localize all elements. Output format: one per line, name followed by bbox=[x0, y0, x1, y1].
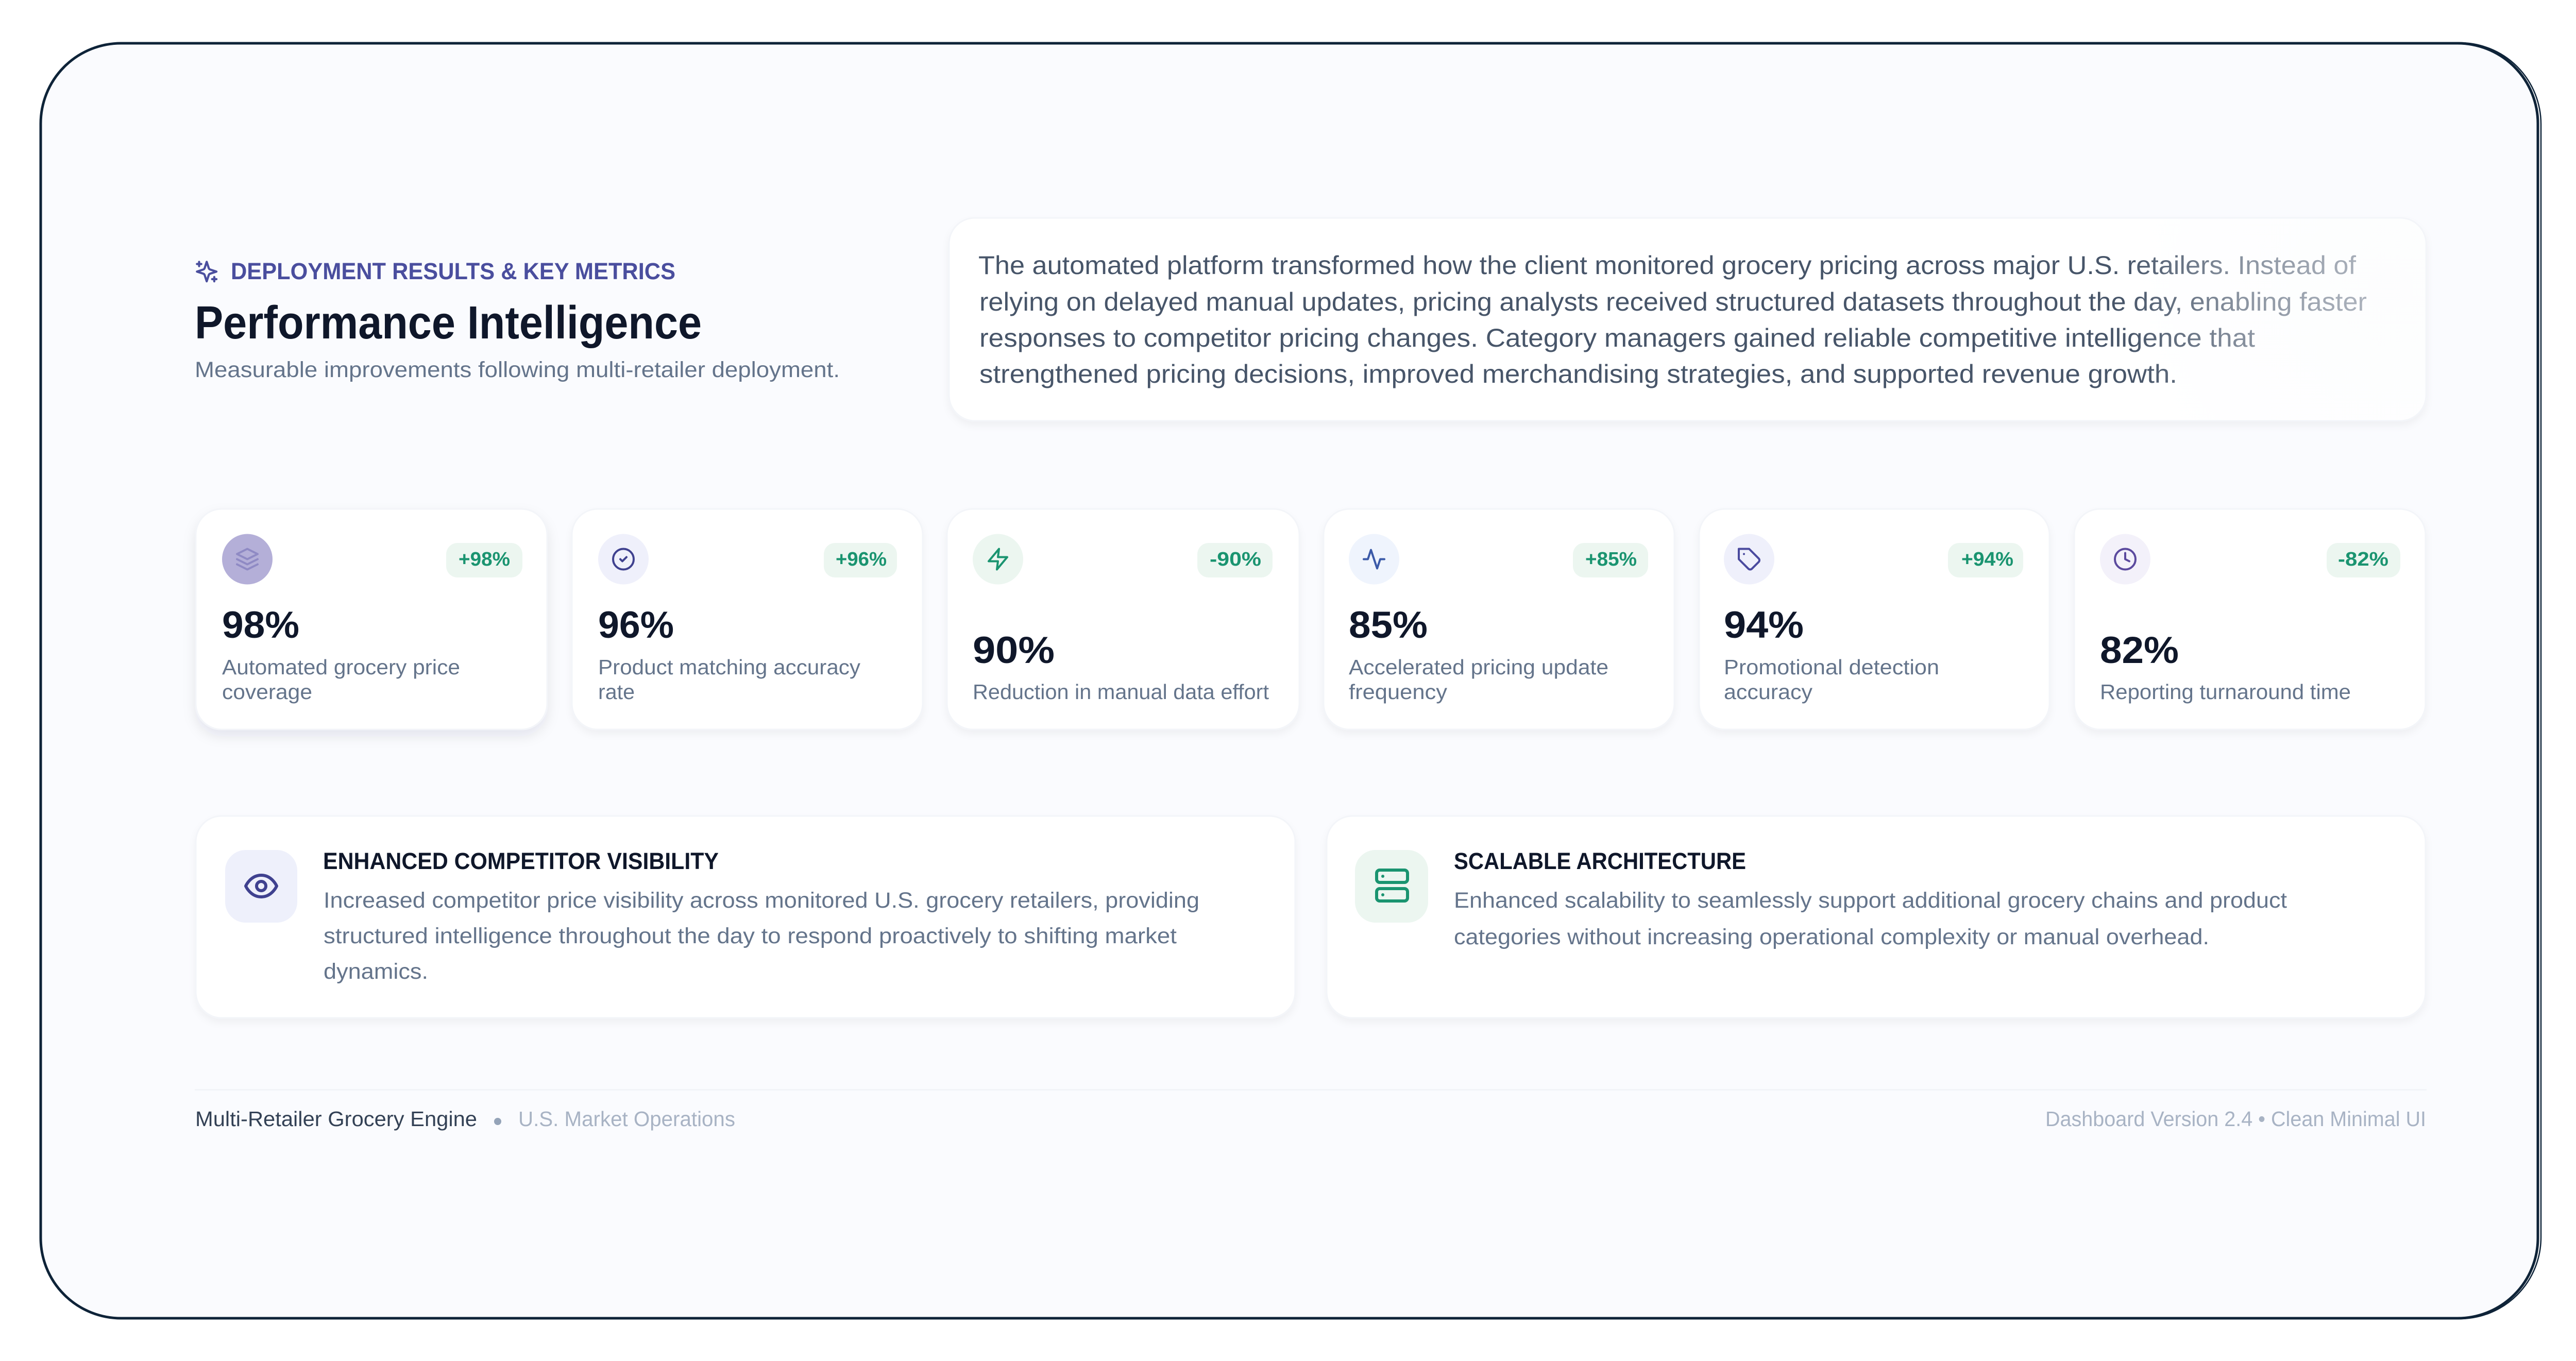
body text: Enhanced scalability to seamlessly support additional grocery chains and product bbox=[1454, 888, 2287, 913]
title: Performance Intelligence bbox=[195, 297, 702, 349]
label: Accelerated pricing update bbox=[1349, 655, 1608, 679]
badge bbox=[446, 543, 522, 577]
icon: clock bbox=[2100, 534, 2150, 584]
value: 90% bbox=[973, 630, 1055, 671]
panel: stat card 85% bbox=[1324, 509, 1674, 729]
subtitle: Measurable improvements following multi-retailer deployment. bbox=[195, 358, 840, 382]
label bbox=[1724, 655, 1939, 704]
label bbox=[1349, 655, 1608, 704]
body text: Increased competitor price visibility across monitored U.S. grocery retailers, providing bbox=[324, 888, 1199, 913]
icon: zap bbox=[973, 534, 1023, 584]
icon: server bbox=[1355, 850, 1428, 923]
badge: -90% bbox=[1210, 549, 1261, 570]
label: Reporting turnaround time bbox=[2100, 680, 2351, 704]
badge: +85% bbox=[1585, 549, 1637, 570]
paragraph text: strengthened pricing decisions, improved merchandising strategies, and supported revenue growth. bbox=[979, 360, 2177, 388]
body text: categories without increasing operational complexity or manual overhead. bbox=[1454, 925, 2209, 949]
label bbox=[222, 655, 460, 704]
footer left: Multi-Retailer Grocery Engine bbox=[195, 1107, 477, 1131]
badge: +96% bbox=[836, 549, 887, 570]
badge: +98% bbox=[459, 549, 510, 570]
value: 96% bbox=[598, 604, 674, 646]
body text: dynamics. bbox=[324, 959, 428, 984]
badge: -82% bbox=[2338, 549, 2388, 570]
icon: tag bbox=[1724, 534, 1774, 584]
icon: eye bbox=[225, 850, 297, 923]
label: rate bbox=[598, 680, 635, 704]
paragraph text: responses to competitor pricing changes. Category managers gained reliable competitive intelligence that bbox=[979, 324, 2255, 352]
heading: ENHANCED COMPETITOR VISIBILITY bbox=[323, 848, 719, 874]
icon: sparkles bbox=[197, 262, 216, 281]
icon: activity bbox=[1349, 534, 1399, 584]
body text: structured intelligence throughout the day to respond proactively to shifting market bbox=[324, 924, 1177, 948]
badge bbox=[824, 543, 897, 577]
footer left bbox=[195, 1107, 735, 1131]
kicker: DEPLOYMENT RESULTS & KEY METRICS bbox=[231, 258, 675, 284]
body text bbox=[324, 888, 1199, 984]
icon: layers bbox=[222, 534, 273, 584]
value: 94% bbox=[1724, 604, 1804, 646]
badge: +94% bbox=[1961, 549, 2013, 570]
badge bbox=[1197, 543, 1273, 577]
value: 85% bbox=[1349, 604, 1428, 646]
label: frequency bbox=[1349, 680, 1448, 704]
paragraph text bbox=[978, 251, 2367, 388]
panel: stat card 82% bbox=[2074, 509, 2426, 729]
label: Reduction in manual data effort bbox=[973, 680, 1269, 704]
header block bbox=[195, 258, 840, 382]
paragraph text: The automated platform transformed how the client monitored grocery pricing across major U.S. retailers. Instead of bbox=[978, 251, 2356, 280]
panel: scalable architecture bbox=[1327, 816, 2426, 1018]
badge bbox=[1948, 543, 2023, 577]
label: Promotional detection bbox=[1724, 655, 1939, 679]
footer left: U.S. Market Operations bbox=[518, 1107, 735, 1131]
body text bbox=[1454, 888, 2287, 949]
panel: stat card 94% bbox=[1699, 509, 2049, 729]
value: 82% bbox=[2100, 630, 2179, 671]
heading: SCALABLE ARCHITECTURE bbox=[1454, 848, 1746, 874]
footer right: Dashboard Version 2.4 • Clean Minimal UI bbox=[2045, 1107, 2426, 1131]
label: coverage bbox=[222, 680, 312, 704]
label: accuracy bbox=[1724, 680, 1813, 704]
paragraph text: relying on delayed manual updates, pricing analysts received structured datasets throughout the day, enabling faster bbox=[979, 287, 2367, 316]
icon: check circle bbox=[598, 534, 649, 584]
value: 98% bbox=[222, 604, 299, 646]
badge bbox=[1573, 543, 1648, 577]
label: Product matching accuracy bbox=[598, 655, 861, 679]
label: Automated grocery price bbox=[222, 655, 460, 679]
panel: stat card 98% bbox=[196, 509, 547, 729]
panel: stat card 96% bbox=[572, 509, 923, 729]
panel: summary paragraph bbox=[949, 218, 2426, 421]
panel: stat card 90% bbox=[947, 509, 1299, 729]
panel: enhanced competitor visibility bbox=[196, 816, 1295, 1018]
label bbox=[598, 655, 861, 704]
badge bbox=[2327, 543, 2400, 577]
